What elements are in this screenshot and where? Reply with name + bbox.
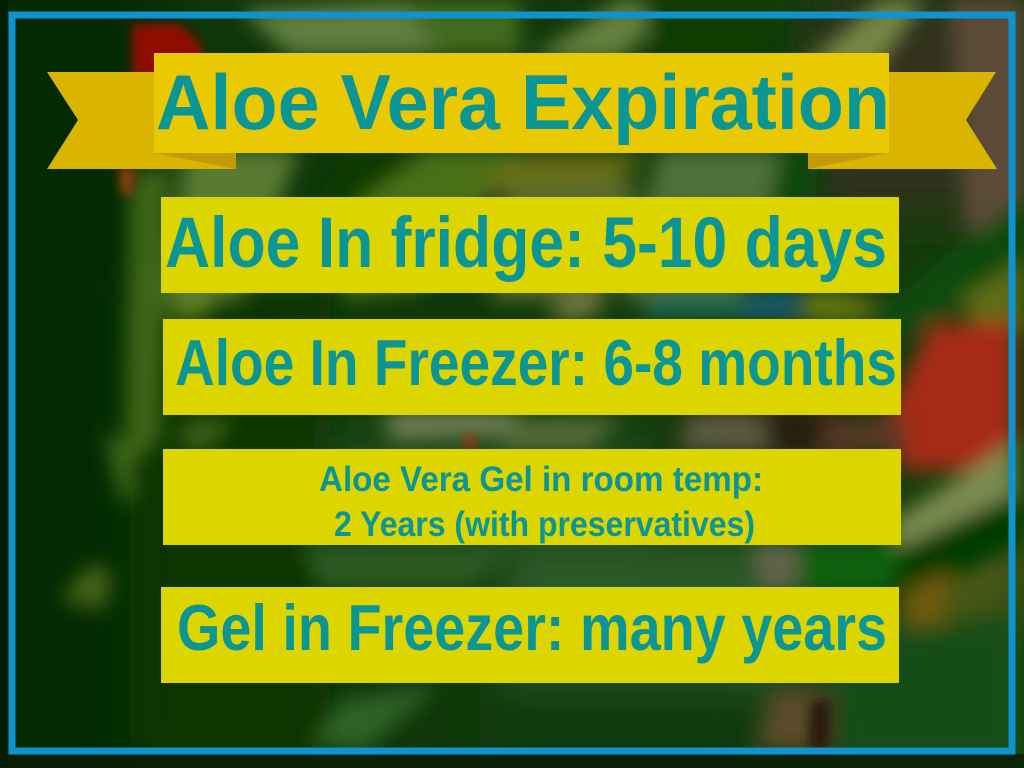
panel: gel in room temperature: [163, 449, 901, 545]
ribbon right tail: [808, 72, 997, 169]
label: fridge: Aloe In fridge: 5-10 days: [165, 204, 887, 283]
ribbon main band: [154, 53, 889, 153]
left-hand leaves: [125, 165, 170, 470]
title ribbon: [47, 53, 997, 169]
centre gaps: [180, 420, 235, 450]
ribbon left fold: [154, 153, 236, 169]
dark strips outside the frame: [0, 754, 1024, 768]
label: gel room temp: Aloe Vera Gel in room temp:: [319, 460, 763, 499]
title: Aloe Vera Expiration: [156, 58, 890, 146]
panel: gel in room temperature: 2 Years (with preservatives): [334, 505, 755, 544]
label: freezer: Aloe In Freezer: 6-8 months: [175, 326, 897, 399]
panel: aloe in freezer: [163, 319, 901, 415]
right-hand leaves and flower: [855, 195, 1024, 330]
red flower top-left: [132, 24, 202, 78]
ribbon right fold: [808, 153, 888, 169]
panel: gel in freezer: [161, 587, 899, 683]
ribbon left tail: [47, 72, 236, 169]
panel: aloe in fridge: [161, 197, 899, 293]
label: gel freezer: Gel in Freezer: many years: [177, 591, 887, 664]
